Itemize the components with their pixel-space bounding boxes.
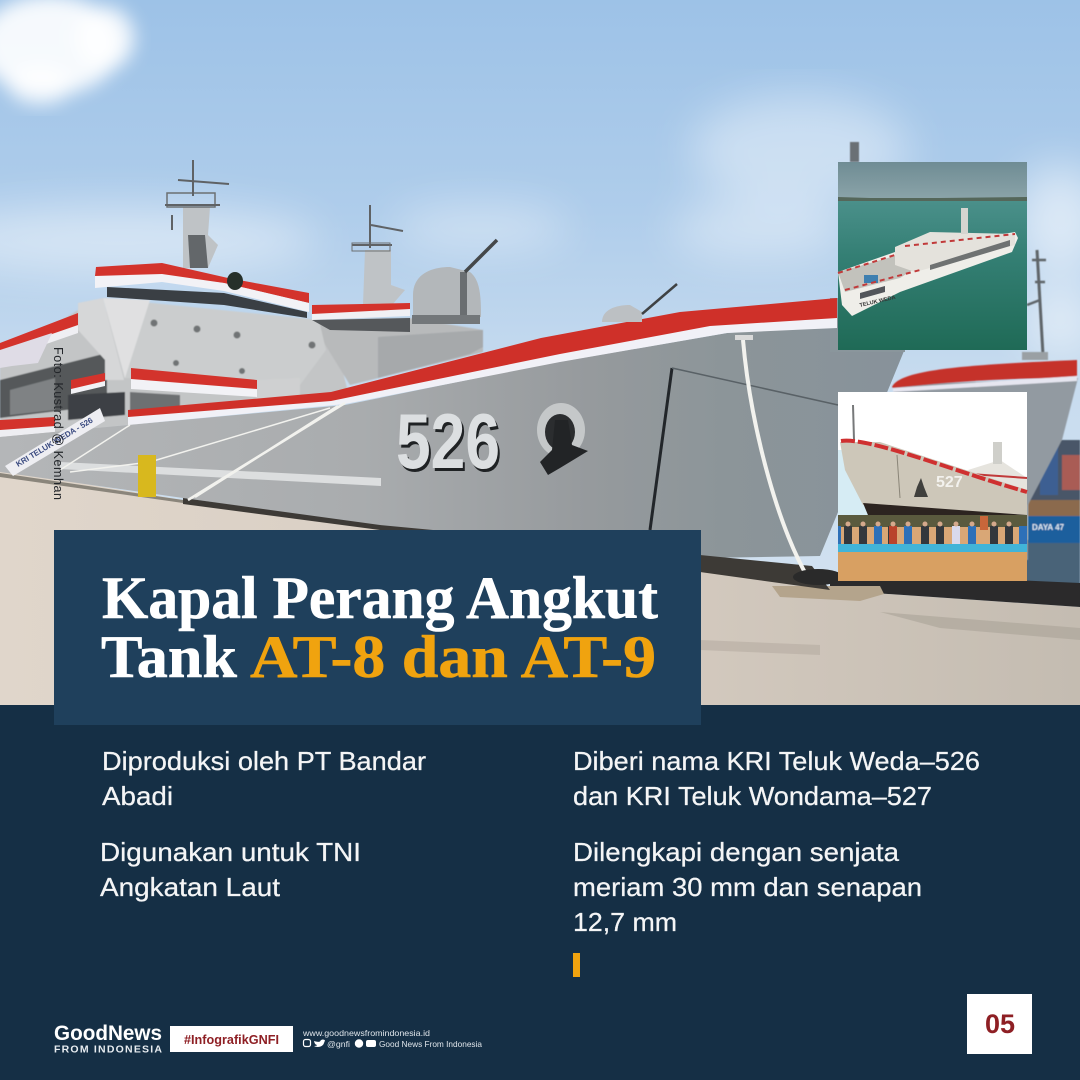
anchor in hawsepipe	[537, 403, 588, 475]
pier concrete	[0, 470, 1080, 705]
hashtag badge: #InfografikGNFI	[184, 1032, 279, 1047]
hull number 526: 526	[398, 401, 502, 488]
text: producer: Abadi	[102, 781, 173, 811]
main hull	[0, 298, 905, 590]
text: user: Angkatan Laut	[100, 872, 281, 902]
gangway banner: KRI TELUK WEDA - 526	[14, 415, 95, 469]
footer website and socials: www.goodnewsfromindonesia.id	[302, 1028, 430, 1038]
mast two	[352, 205, 405, 305]
icon: twitter	[314, 1039, 325, 1047]
text: user	[100, 837, 361, 902]
photo credit: Foto: Kustrad @ Kemhan	[51, 347, 65, 500]
second ship bow on the right	[850, 142, 1078, 560]
bottom dark panel	[0, 705, 1080, 1080]
text: armament: 12,7 mm	[573, 907, 677, 937]
gangway banner	[5, 408, 105, 476]
yellow bollard box	[138, 455, 156, 497]
red and white hull bunting	[128, 298, 837, 425]
text: user: Digunakan untuk TNI	[100, 837, 361, 867]
inset anchor	[914, 478, 928, 497]
inset white ship	[838, 208, 1018, 316]
inset blue stage and sand	[838, 544, 1027, 581]
icon: youtube	[366, 1040, 376, 1047]
text: armament	[573, 837, 922, 937]
page number box	[967, 994, 1032, 1054]
handle: @gnfi	[327, 1039, 350, 1049]
superstructure rear	[0, 298, 483, 440]
page number box: 05	[985, 1009, 1015, 1039]
inset pale sky	[838, 450, 878, 520]
title line 2: Tank	[101, 624, 238, 690]
inset number 527: 527	[936, 474, 963, 491]
inset photo: ship at sea	[838, 162, 1027, 350]
icon: facebook	[355, 1039, 363, 1048]
text: names: dan KRI Teluk Wondama–527	[573, 781, 932, 811]
inset white ship: TELUK WEDA	[859, 295, 896, 309]
sky with clouds	[0, 0, 1080, 705]
inset hull	[840, 442, 1027, 517]
bridge banners and windows	[0, 263, 410, 437]
inset sky	[838, 162, 1027, 198]
title line 2	[101, 624, 656, 690]
title box	[54, 530, 701, 725]
mast one	[165, 160, 229, 268]
inset photo: launching ceremony of hull 527	[838, 392, 1027, 581]
small gun on foredeck	[602, 284, 677, 322]
footer website and socials	[302, 1028, 482, 1049]
mooring ropes	[60, 335, 843, 585]
inset crowd row	[838, 515, 1027, 545]
footer logo: FROM INDONESIA	[54, 1044, 162, 1056]
text: armament: meriam 30 mm dan senapan	[573, 872, 922, 902]
inset shoreline	[838, 197, 1027, 201]
water and tugboat on the right: DAYA 47	[1032, 523, 1065, 532]
footer logo: GoodNews	[54, 1022, 162, 1045]
text: armament: Dilengkapi dengan senjata	[573, 837, 900, 867]
text: names	[573, 746, 980, 811]
orange accent marker	[573, 953, 580, 977]
water and tugboat on the right	[1020, 440, 1080, 590]
text: producer: Diproduksi oleh PT Bandar	[102, 746, 426, 776]
footer logo	[54, 1022, 162, 1056]
hashtag badge	[170, 1026, 293, 1052]
text: names: Diberi nama KRI Teluk Weda–526	[573, 746, 980, 776]
naval gun turret	[412, 240, 497, 324]
icon: instagram	[304, 1040, 310, 1046]
title line 1: Kapal Perang Angkut	[102, 565, 658, 631]
channel name: Good News From Indonesia	[379, 1039, 482, 1049]
title line 2: AT-8 dan AT-9	[250, 624, 656, 690]
text: producer	[102, 746, 426, 811]
photo: warship at the pier	[0, 0, 1080, 705]
hull number 526: 526	[396, 398, 500, 485]
inset superstructure	[853, 405, 1027, 500]
